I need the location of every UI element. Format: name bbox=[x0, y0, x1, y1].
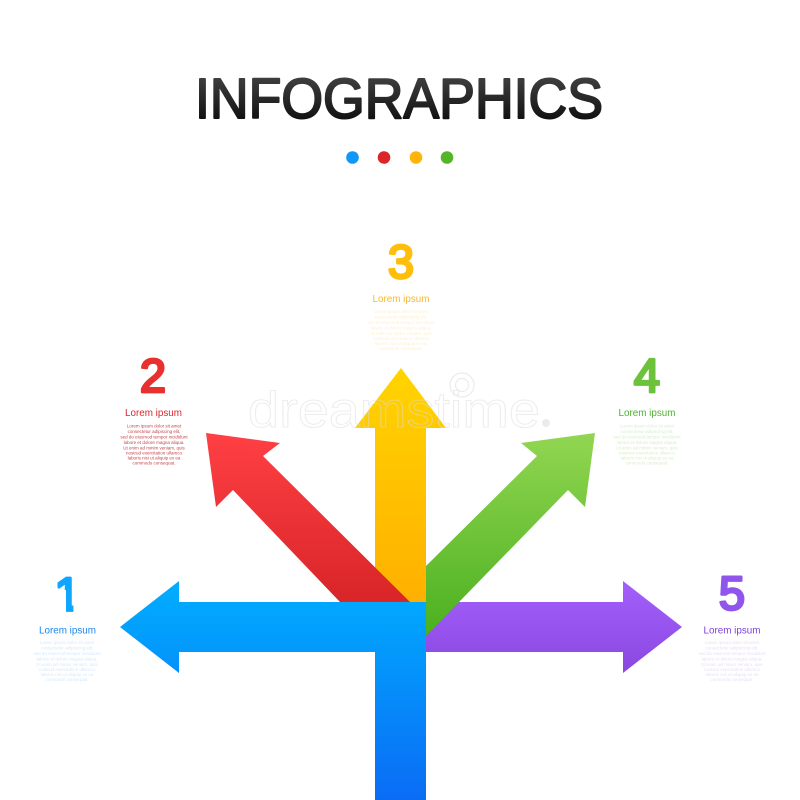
text block 4 bbox=[613, 424, 681, 466]
text block 5: consectetur adipiscing elit, bbox=[706, 646, 758, 650]
arrow 2: red bbox=[206, 433, 410, 602]
text block 3: consectetur adipiscing elit, bbox=[375, 314, 427, 320]
text block 3: commodo consequat. bbox=[379, 346, 423, 351]
step 2 bbox=[120, 349, 188, 466]
text block 3: laboris nisi ut aliquip ex ea bbox=[375, 341, 428, 346]
arrow 1: blue bbox=[120, 581, 426, 800]
text block 1: sed do eiusmod tempor incididunt bbox=[33, 651, 101, 656]
text block 2 bbox=[120, 424, 188, 466]
text block 4: nostrud exercitation ullamco bbox=[619, 450, 676, 456]
text block 2: commodo consequat. bbox=[132, 460, 176, 466]
text block 2: nostrud exercitation ullamco bbox=[126, 450, 183, 456]
text block 3: sed do eiusmod tempor incididunt bbox=[367, 320, 435, 325]
text block 1: Lorem ipsum dolor sit amet bbox=[40, 640, 95, 645]
heading 3: Lorem ipsum bbox=[372, 293, 430, 305]
heading 5: Lorem ipsum bbox=[704, 624, 761, 636]
step 5 bbox=[698, 566, 766, 682]
text block 5: laboris nisi ut aliquip ex ea bbox=[706, 672, 759, 677]
step 1 bbox=[33, 568, 101, 682]
step 3 bbox=[367, 235, 435, 351]
text block 1: Ut enim ad minim veniam, quis bbox=[36, 662, 99, 667]
text block 2: Lorem ipsum dolor sit amet bbox=[127, 424, 182, 428]
arrow 5: purple bbox=[426, 581, 682, 673]
text block 3 bbox=[367, 309, 435, 351]
text block 5: sed do eiusmod tempor incididunt bbox=[698, 651, 766, 656]
number 3: 3 bbox=[388, 235, 414, 288]
text block 5: labore et dolore magna aliqua. bbox=[702, 656, 762, 662]
text block 1: commodo consequat. bbox=[45, 677, 89, 682]
text block 5: nostrud exercitation ullamco bbox=[704, 667, 761, 672]
text block 2: laboris nisi ut aliquip ex ea bbox=[128, 456, 181, 460]
heading 4: Lorem ipsum bbox=[618, 407, 676, 419]
text block 2: sed do eiusmod tempor incididunt bbox=[120, 434, 188, 440]
text block 4: Ut enim ad minim veniam, quis bbox=[616, 446, 679, 450]
text block 5: Lorem ipsum dolor sit amet bbox=[705, 640, 760, 645]
text block 1: labore et dolore magna aliqua. bbox=[37, 656, 97, 662]
number 4: 4 bbox=[634, 349, 660, 402]
text block 1: nostrud exercitation ullamco bbox=[39, 667, 96, 672]
text block 3: Ut enim ad minim veniam, quis bbox=[370, 331, 433, 336]
text block 1: laboris nisi ut aliquip ex ea bbox=[41, 672, 94, 677]
text block 4: labore et dolore magna aliqua. bbox=[617, 440, 677, 445]
text block 1 bbox=[33, 640, 101, 682]
title: INFOGRAPHICS bbox=[195, 67, 603, 131]
number 2: 2 bbox=[140, 349, 166, 402]
text block 4: commodo consequat. bbox=[625, 460, 669, 466]
arrow 4: green bbox=[426, 433, 595, 636]
heading 2: Lorem ipsum bbox=[125, 407, 182, 419]
step 4 bbox=[613, 349, 681, 466]
heading 1: Lorem ipsum bbox=[39, 624, 96, 636]
text block 4: Lorem ipsum dolor sit amet bbox=[620, 424, 675, 428]
text block 1: consectetur adipiscing elit, bbox=[41, 646, 93, 650]
text block 5: commodo consequat. bbox=[710, 677, 754, 682]
arrow 3: yellow bbox=[355, 368, 446, 602]
text block 2: labore et dolore magna aliqua. bbox=[124, 440, 184, 445]
text block 4: consectetur adipiscing elit, bbox=[621, 429, 673, 434]
text block 2: Ut enim ad minim veniam, quis bbox=[123, 446, 186, 450]
text block 5 bbox=[698, 640, 766, 682]
watermark: dreamstime bbox=[248, 382, 540, 438]
text block 3: nostrud exercitation ullamco bbox=[373, 336, 430, 341]
text block 4: laboris nisi ut aliquip ex ea bbox=[621, 456, 674, 460]
text block 3: labore et dolore magna aliqua. bbox=[371, 326, 431, 330]
text block 4: sed do eiusmod tempor incididunt bbox=[613, 434, 681, 440]
number 1: 1 bbox=[54, 568, 81, 620]
colour dots bbox=[346, 151, 453, 164]
text block 2: consectetur adipiscing elit, bbox=[128, 429, 180, 434]
number 5: 5 bbox=[719, 566, 745, 620]
text block 5: Ut enim ad minim veniam, quis bbox=[701, 662, 764, 667]
text block 3: Lorem ipsum dolor sit amet bbox=[374, 309, 429, 314]
